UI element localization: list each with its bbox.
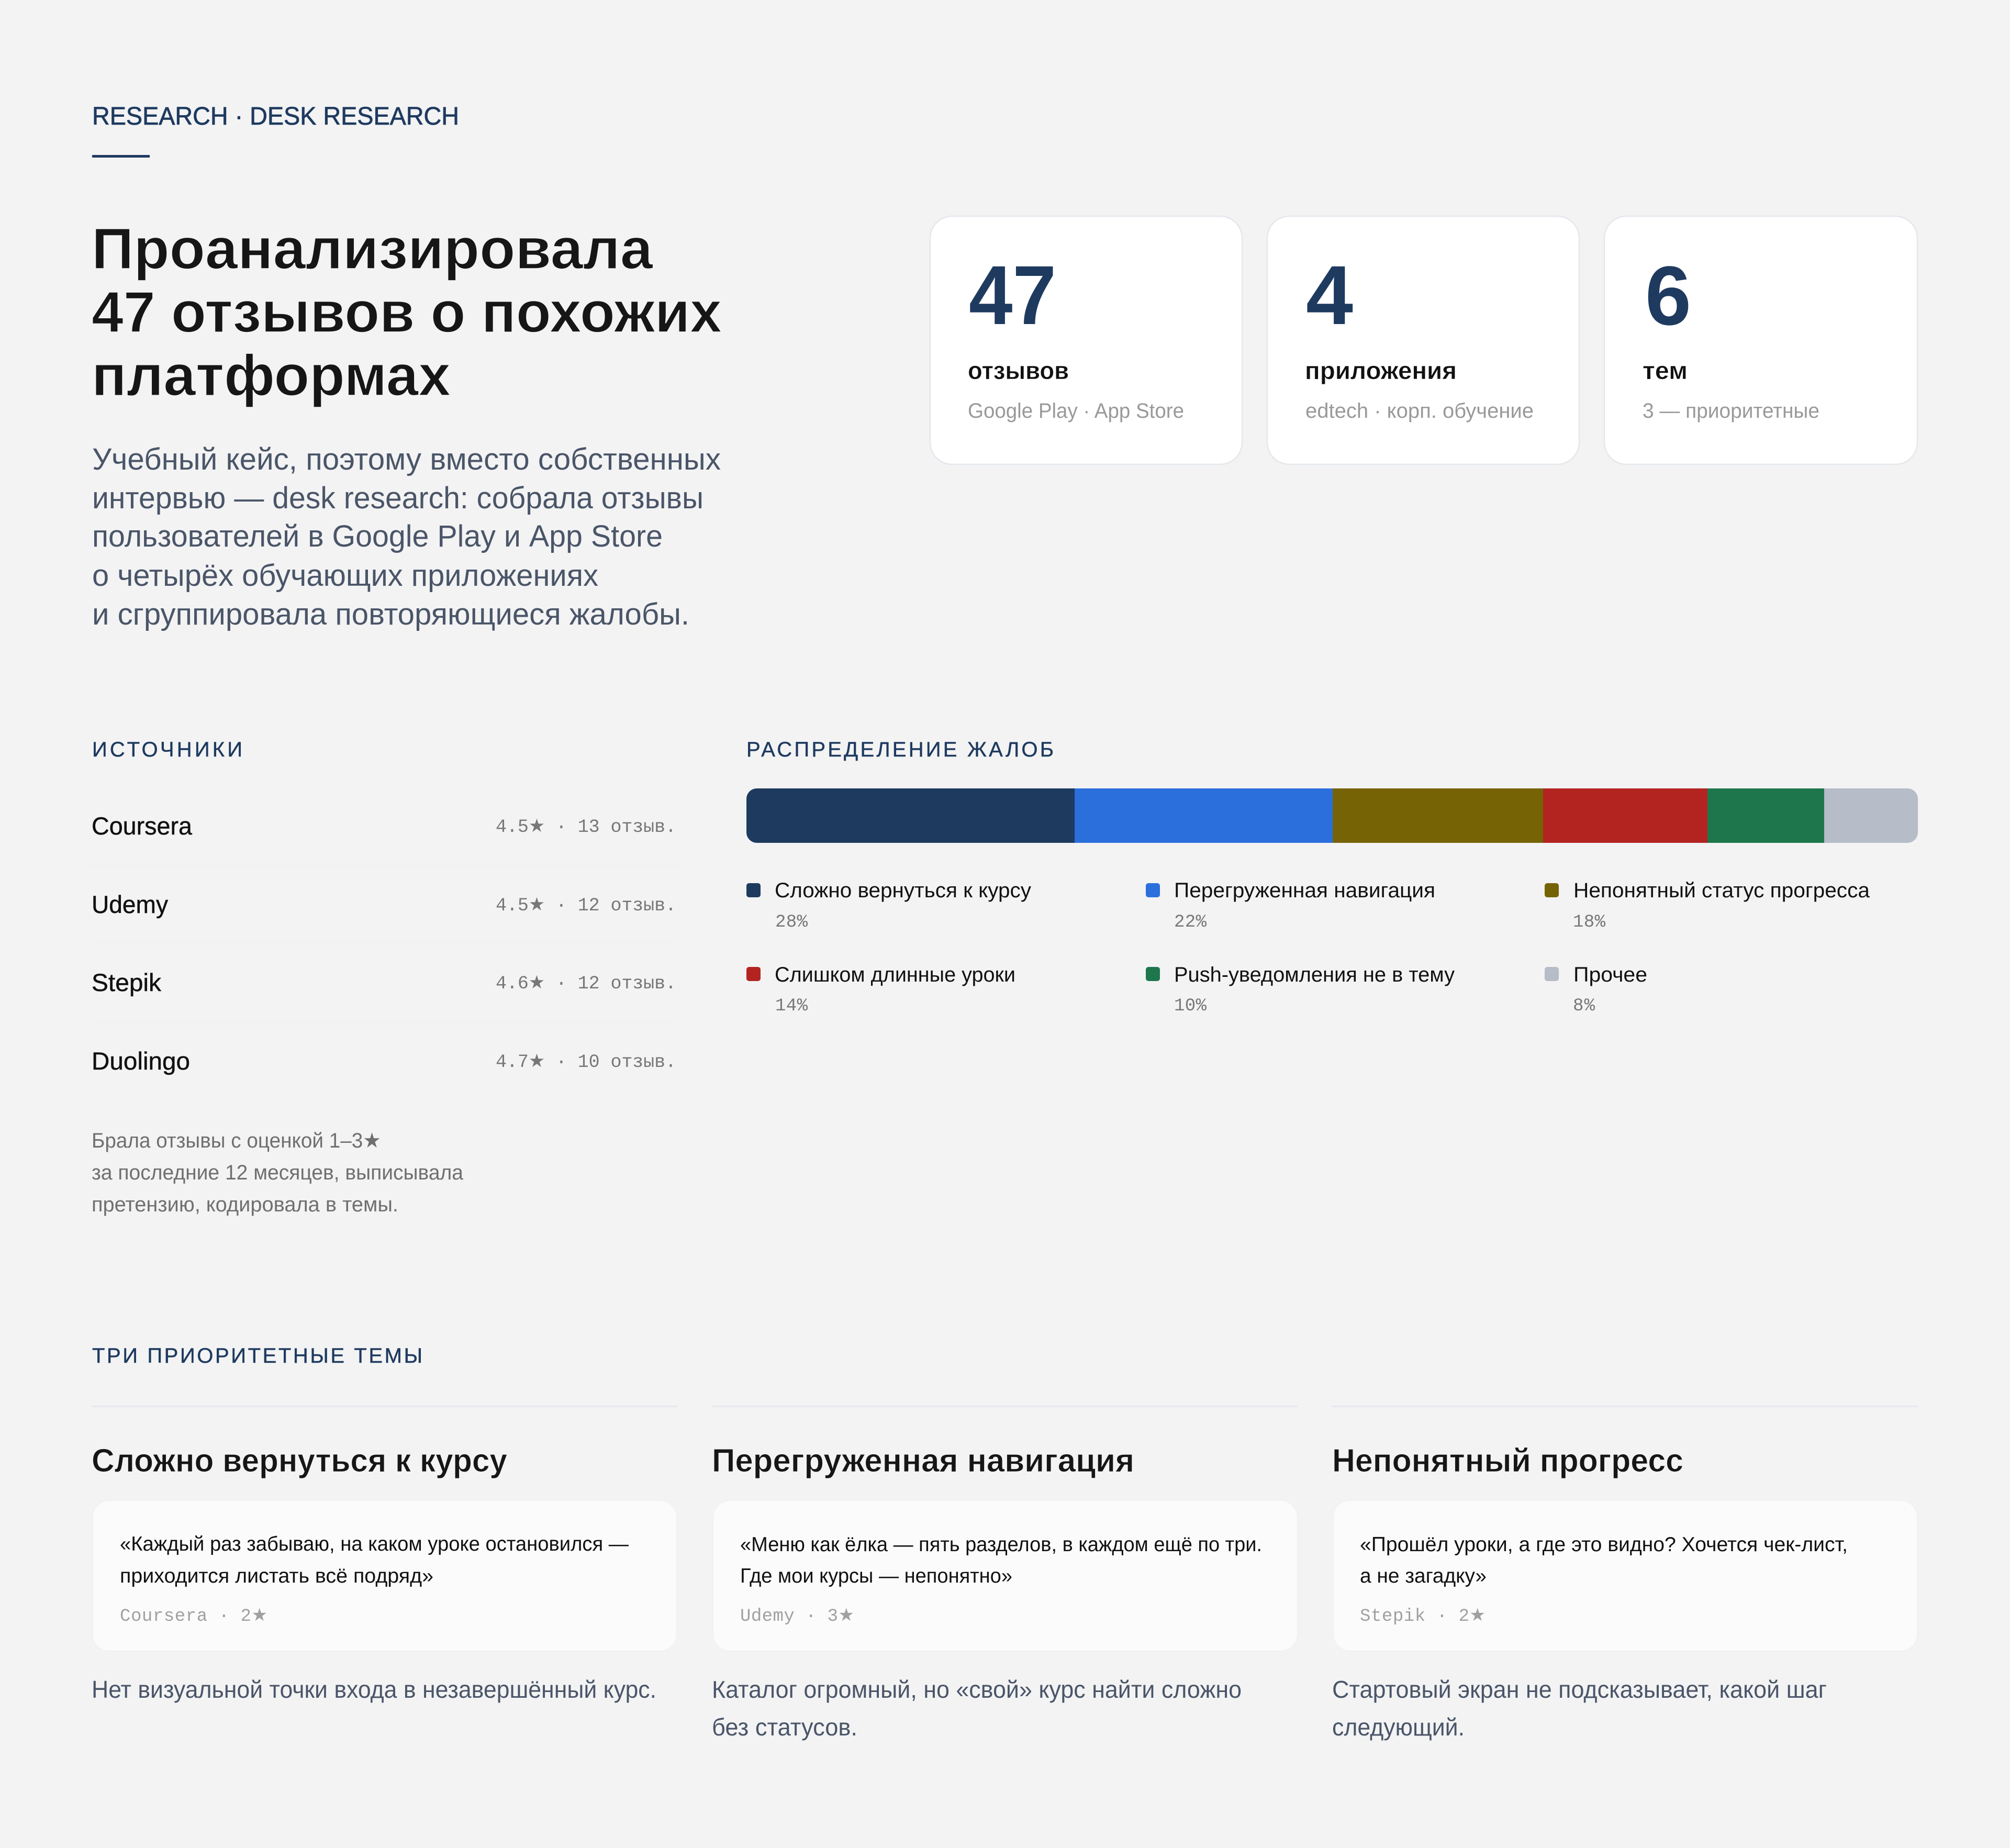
method note: претензию, кодировала в темы. [92,1193,398,1216]
stat number 6: 6 [1645,249,1691,342]
legend item 18%: Непонятный статус прогресса [1573,879,1870,902]
legend item 14%: 14% [775,996,808,1016]
intro paragraph: о четырёх обучающих приложениях [92,559,598,593]
title: Проанализировала [92,217,653,281]
legend item 28%: Сложно вернуться к курсу [775,879,1031,902]
legend item 18%: 18% [1573,912,1606,932]
panel: stat card reviews [930,216,1242,464]
legend item 28%: 28% [775,912,808,932]
stat number 47: 47 [969,248,1056,342]
source row Duolingo: Duolingo [92,1047,190,1075]
method note: за последние 12 месяцев, выписывала [92,1161,464,1184]
legend item 14% [746,963,1015,1016]
quote card [93,1500,677,1651]
theme heading: Перегруженная навигация [712,1443,1134,1479]
header eyebrow: RESEARCH · DESK RESEARCH [92,103,459,130]
legend item 28% [746,879,1031,932]
legend item 14%: Слишком длинные уроки [775,963,1015,986]
quote card: «Прошёл уроки, а где это видно? Хочется чек-лист, [1360,1533,1848,1556]
panel: stat card apps [1267,216,1579,464]
theme insight: без статусов. [712,1713,857,1741]
method note: Брала отзывы с оценкой 1–3★ [92,1129,381,1152]
quote card: Udemy · 3★ [740,1605,854,1627]
source row Stepik: 4.6★ · 12 отзыв. [496,972,676,994]
intro paragraph: интервью — desk research: собрала отзывы [92,481,704,515]
quote card: приходится листать всё подряд» [120,1565,433,1587]
heading: three priority themes: ТРИ ПРИОРИТЕТНЫЕ ТЕМЫ [92,1344,422,1367]
theme insight [1332,1676,1827,1741]
quote card [713,1500,1298,1651]
heading: distribution: РАСПРЕДЕЛЕНИЕ ЖАЛОБ [746,738,1054,761]
legend item 22%: Перегруженная навигация [1174,879,1435,902]
intro paragraph: Учебный кейс, поэтому вместо собственных [92,442,721,476]
stat label: отзывов [968,357,1069,384]
heading: sources: ИСТОЧНИКИ [92,738,242,761]
legend item 10%: Push-уведомления не в тему [1174,963,1455,986]
panel: complaint distribution [746,738,1918,1016]
stat label: тем [1643,357,1688,384]
legend item 8%: Прочее [1573,963,1647,986]
theme insight [712,1676,1242,1741]
source row Coursera: 4.5★ · 13 отзыв. [496,816,676,838]
title: 47 отзывов о похожих [92,280,722,344]
source row Duolingo: 4.7★ · 10 отзыв. [496,1051,676,1073]
source row Coursera [92,812,676,840]
source row Udemy [92,890,676,918]
method note [92,1129,464,1216]
intro paragraph [92,442,721,631]
panel: theme 2 [712,1406,1298,1741]
legend item 18% [1545,879,1870,932]
header eyebrow [92,103,459,158]
theme insight: следующий. [1332,1713,1465,1741]
source row Duolingo [92,1047,676,1075]
legend item 10% [1146,963,1455,1016]
stat label: приложения [1305,357,1457,384]
source row Coursera: Coursera [92,812,193,840]
stat note: edtech · корп. обучение [1305,399,1534,422]
theme heading: Сложно вернуться к курсу [92,1443,507,1479]
quote card: Где мои курсы — непонятно» [740,1565,1012,1587]
legend item 10%: 10% [1174,996,1207,1016]
stat note: 3 — приоритетные [1643,399,1819,422]
intro paragraph: и сгруппировала повторяющиеся жалобы. [92,597,689,631]
intro paragraph: пользователей в Google Play и App Store [92,519,663,553]
panel: theme 3 [1332,1406,1918,1741]
title: платформах [92,343,451,408]
source row Stepik [92,968,676,996]
quote card: а не загадку» [1360,1565,1487,1587]
legend item 22% [1146,879,1435,932]
source row Udemy: 4.5★ · 12 отзыв. [496,894,676,916]
theme heading: Непонятный прогресс [1332,1443,1683,1479]
panel: theme 1 [92,1406,677,1703]
panel: sources [92,738,677,1216]
theme insight: Каталог огромный, но «свой» курс найти сложно [712,1676,1242,1703]
legend item 8% [1545,963,1647,1016]
theme insight: Стартовый экран не подсказывает, какой шаг [1332,1676,1827,1703]
source row Udemy: Udemy [92,890,168,918]
panel: stat card themes [1604,216,1917,464]
stacked bar chart [746,788,1918,843]
quote card: «Каждый раз забываю, на каком уроке остановился — [120,1533,629,1555]
stat number 4: 4 [1306,248,1353,342]
quote card: Stepik · 2★ [1360,1605,1486,1627]
legend item 8%: 8% [1573,996,1595,1016]
stat note: Google Play · App Store [968,399,1184,422]
title [92,217,722,408]
quote card: Coursera · 2★ [120,1605,267,1627]
quote card [1333,1500,1917,1651]
source row Stepik: Stepik [92,968,161,996]
quote card: «Меню как ёлка — пять разделов, в каждом ещё по три. [740,1533,1262,1556]
theme insight: Нет визуальной точки входа в незавершённый курс. [92,1676,656,1703]
legend item 22%: 22% [1174,912,1207,932]
